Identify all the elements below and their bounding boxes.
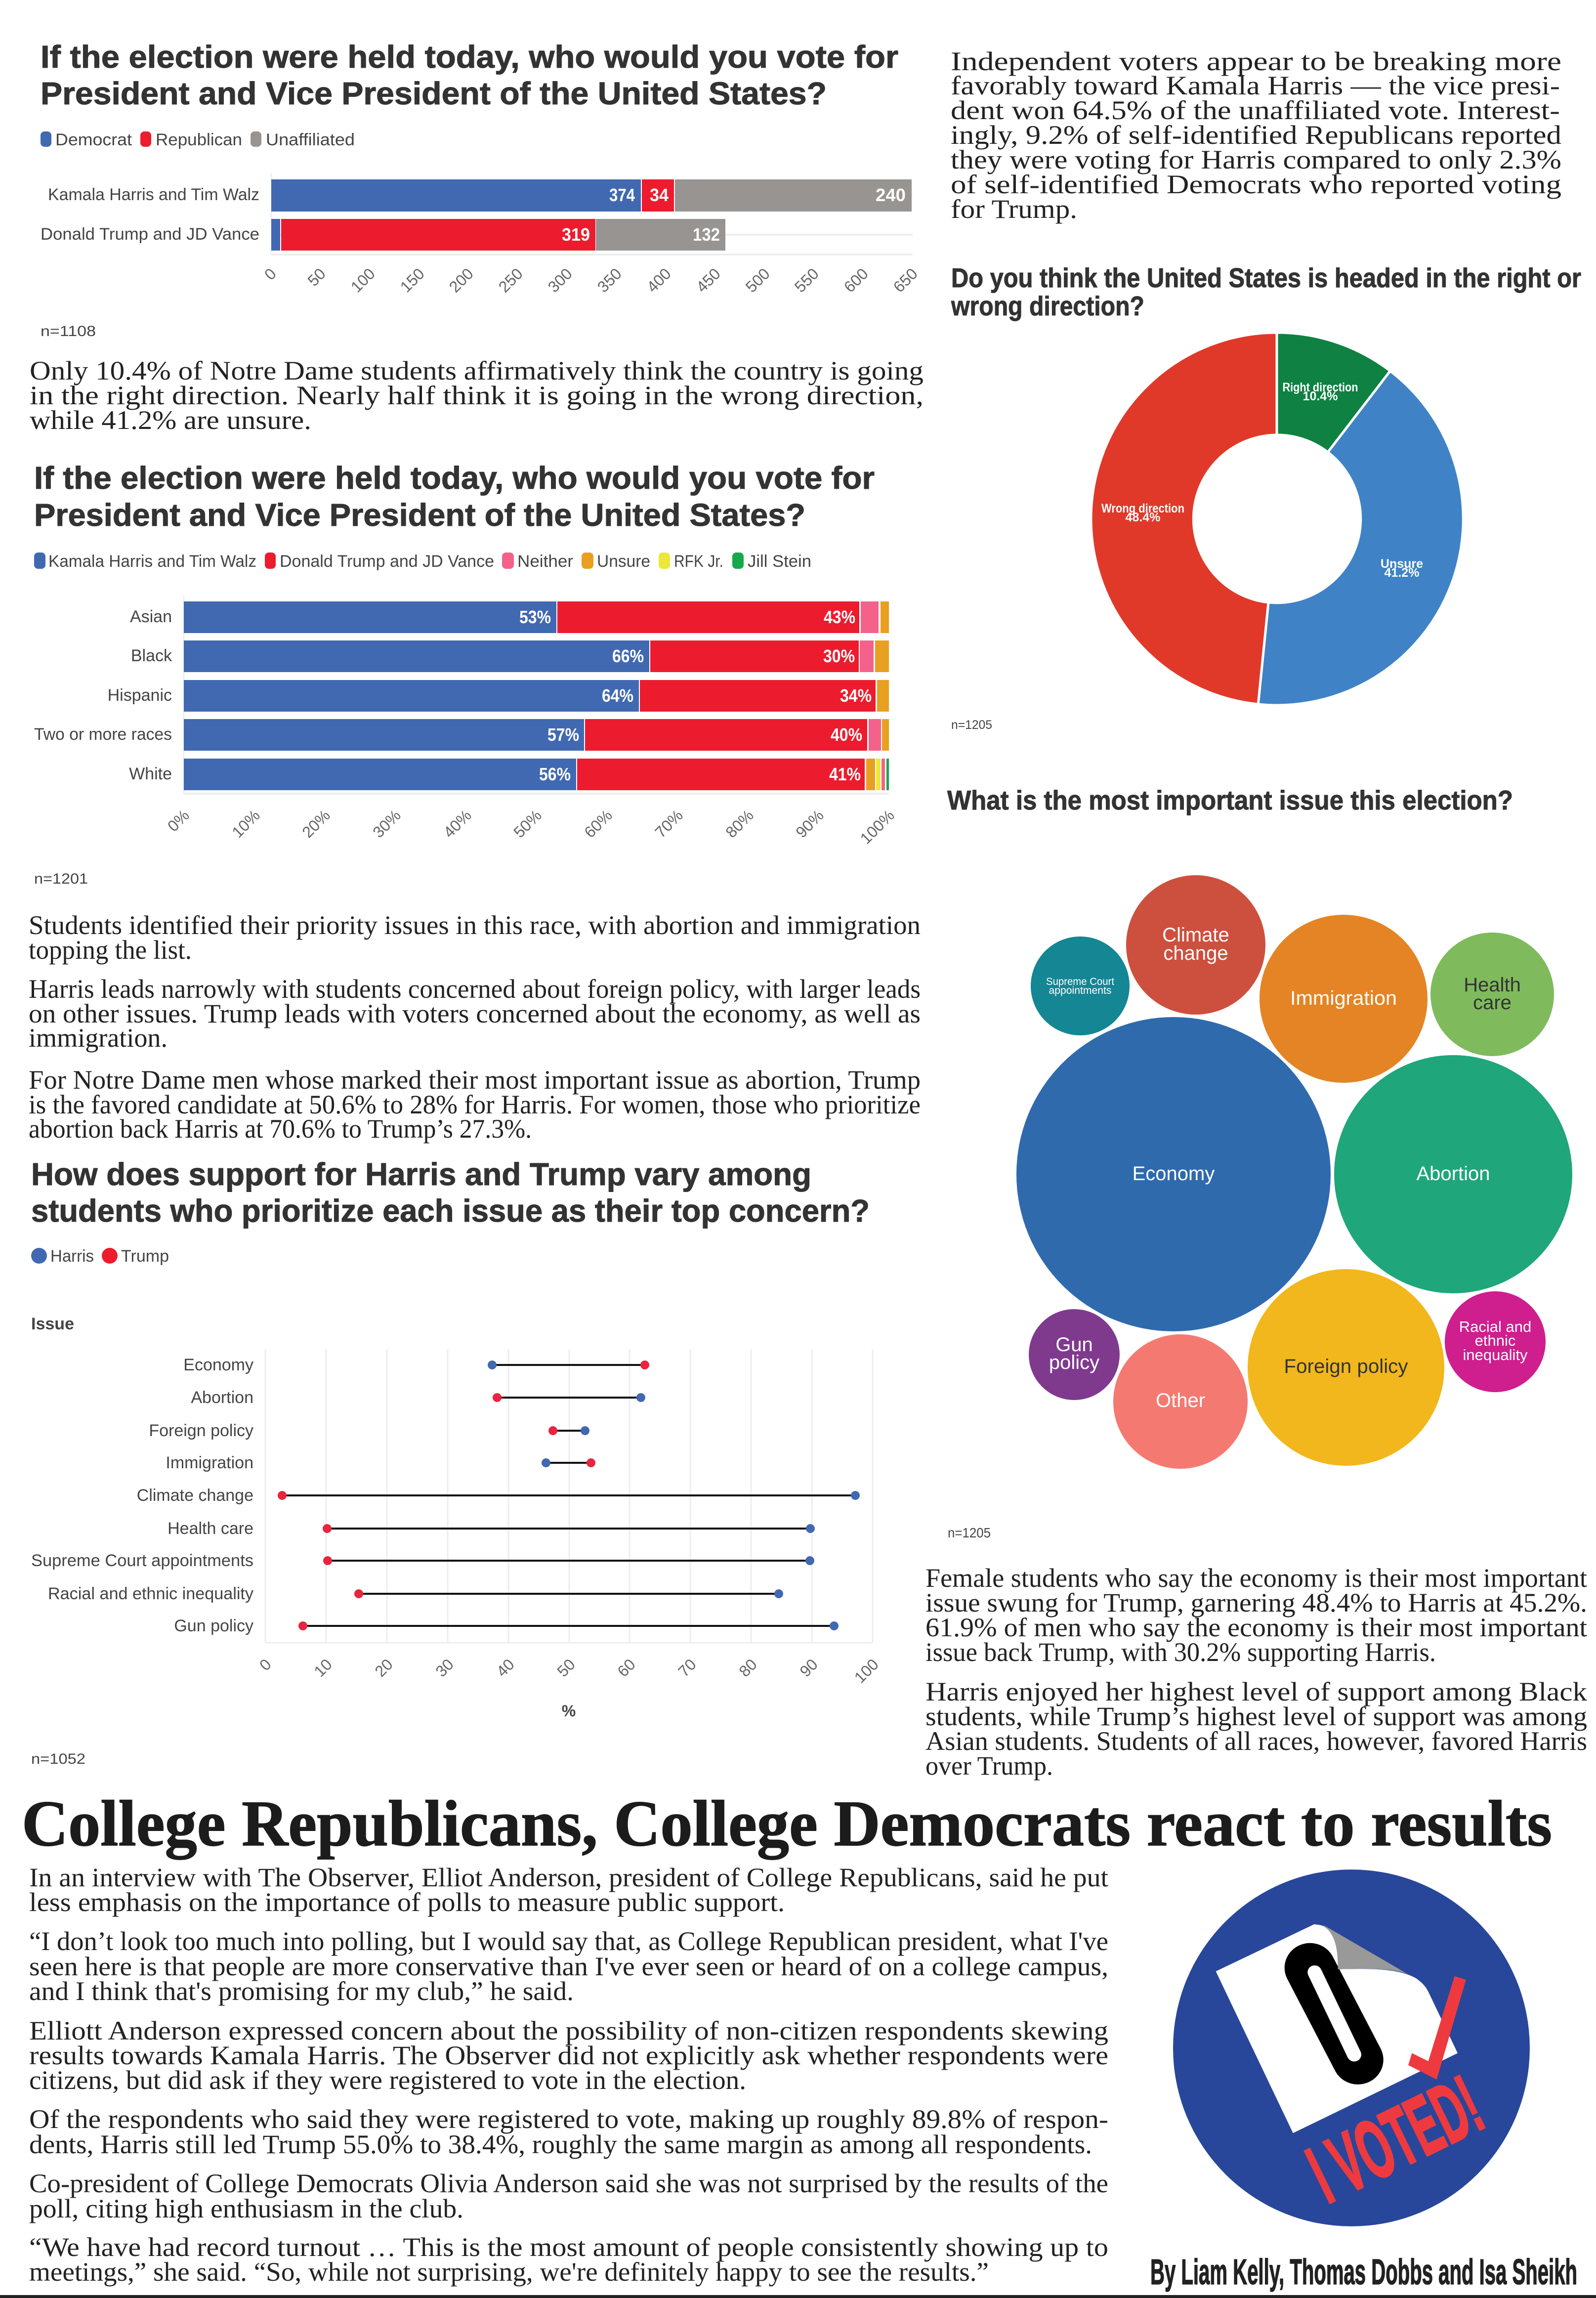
legend: candidates — [34, 552, 811, 571]
text block: reactions article: In an interview with The Observer, Elliot Anderson, president of College Republicans, said he put — [29, 1863, 1108, 1892]
bubble: gun policy — [1029, 1309, 1120, 1400]
chart: Harris vs Trump support by issue: 100 — [851, 1655, 882, 1687]
chart: stacked bars by party: 240 — [876, 185, 906, 205]
bubble: supreme court appointments: Supreme Court — [1046, 976, 1114, 987]
chart: stacked bars by race: 56% — [539, 764, 571, 784]
chart: stacked bars by race: 0% — [164, 806, 193, 835]
legend: Harris and Trump: Harris — [50, 1247, 94, 1266]
text block: gender and race: issue back Trump, with 30.2% supporting Harris. — [925, 1637, 1436, 1667]
donut label: right direction: Right direction — [1283, 381, 1358, 394]
title: vote by party: If the election were held today, who would you vote for — [41, 39, 898, 75]
chart: stacked bars by race: Hispanic — [108, 686, 172, 705]
text block: reactions article: Of the respondents who said they were registered to vote, making up roughly 89.8% of respon- — [29, 2104, 1108, 2134]
bubble: abortion — [1334, 1055, 1572, 1293]
chart: stacked bars by party: 250 — [495, 264, 526, 296]
bubble: foreign policy — [1248, 1269, 1444, 1466]
donut label: unsure: 41.2% — [1385, 566, 1419, 580]
chart: stacked bars by race: Asian — [130, 607, 172, 626]
title: support by issue — [31, 1156, 870, 1229]
chart: stacked bars by race: 40% — [831, 724, 862, 745]
text block: priority issues: For Notre Dame men whose marked their most important issue as abortion, Trump — [29, 1065, 921, 1095]
donut label: right direction: 10.4% — [1303, 389, 1338, 403]
chart: stacked bars by race: 100% — [857, 806, 898, 848]
bubble: racial and ethnic inequality: inequality — [1463, 1346, 1528, 1363]
chart: stacked bars by party: 132 — [693, 224, 720, 245]
text block: gender and race: 61.9% of men who say the economy is their most important — [925, 1613, 1587, 1642]
chart: stacked bars by party: 374 — [609, 185, 635, 205]
text block: reactions article: Co-president of College Democrats Olivia Anderson said she was not surprised by the results of the — [29, 2169, 1108, 2198]
chart: Harris vs Trump support by issue: Foreign policy — [149, 1421, 253, 1440]
chart: Harris vs Trump support by issue: % — [562, 1702, 576, 1720]
text block: independent voters: of self-identified Democrats who reported voting — [951, 170, 1561, 199]
chart: stacked bars by party: 0 — [261, 264, 280, 284]
chart: Harris vs Trump support by issue: Immigration — [166, 1453, 253, 1472]
chart: stacked bars by party: 650 — [890, 264, 921, 296]
chart: stacked bars by party: 400 — [643, 264, 674, 296]
axis title: issue: Issue — [31, 1315, 74, 1333]
bubble: climate change: Climate — [1162, 924, 1229, 946]
chart: Harris vs Trump support by issue: Economy — [183, 1356, 253, 1374]
text block: reactions article: less emphasis on the importance of polls to measure public support. — [29, 1887, 785, 1917]
chart: stacked bars by race: White — [129, 765, 172, 783]
text block: reactions article: poll, citing high enthusiasm in the club. — [29, 2194, 463, 2223]
title: vote by race — [34, 460, 875, 533]
chart: Harris vs Trump support by issue: Abortion — [191, 1388, 253, 1407]
chart: Harris vs Trump support by issue: Climate change — [137, 1486, 253, 1505]
text block: reactions article: dents, Harris still led Trump 55.0% to 38.4%, roughly the same margin as among all respondents. — [29, 2129, 1092, 2159]
chart: stacked bars by race: 70% — [651, 806, 686, 841]
text block: gender and race: over Trump. — [925, 1751, 1053, 1781]
bubble: immigration: Immigration — [1290, 987, 1397, 1009]
text block: gender and race: Female students who say the economy is their most important — [925, 1563, 1587, 1593]
chart: stacked bars by party: Kamala Harris and Tim Walz — [48, 185, 259, 204]
chart: Harris vs Trump support by issue: 80 — [735, 1655, 760, 1680]
legend: party: Republican — [156, 130, 242, 149]
legend: party: Unaffiliated — [266, 130, 355, 149]
text block: reactions article: and I think that's promising for my club,” he said. — [29, 1976, 574, 2006]
title: support by issue: students who prioritize each issue as their top concern? — [31, 1193, 870, 1229]
donut label: unsure: Unsure — [1381, 557, 1423, 571]
headline: College Republicans, College Democrats react to results — [22, 1787, 1552, 1860]
donut label: wrong direction — [1101, 502, 1184, 524]
chart: Harris vs Trump support by issue: Supreme Court appointments — [31, 1551, 253, 1570]
donut label: unsure — [1381, 557, 1423, 580]
chart: Harris vs Trump support by issue: 70 — [674, 1655, 700, 1680]
chart: stacked bars by party: 100 — [347, 264, 378, 296]
text block: priority issues: immigration. — [29, 1023, 168, 1053]
panel: bubble chart — [947, 785, 1572, 1540]
chart: stacked bars by race: Two or more races — [34, 725, 172, 744]
text block: priority issues: abortion back Harris at 70.6% to Trump’s 27.3%. — [29, 1114, 532, 1144]
bubble: gun policy: Gun — [1055, 1334, 1093, 1356]
legend: Harris and Trump — [31, 1247, 169, 1266]
bubble: supreme court appointments — [1031, 936, 1130, 1035]
legend: candidates: Kamala Harris and Tim Walz — [48, 552, 256, 571]
chart: stacked bars by race: 53% — [519, 607, 551, 627]
bubble: health care: care — [1473, 992, 1512, 1014]
chart: stacked bars by race: 30% — [369, 806, 404, 841]
text block: independent voters: favorably toward Kamala Harris — the vice presi- — [951, 71, 1560, 100]
chart: stacked bars by party: 350 — [594, 264, 625, 296]
bubble: health care — [1430, 933, 1554, 1056]
chart: Harris vs Trump support by issue: 30 — [432, 1655, 457, 1680]
chart: Harris vs Trump support by issue: Racial and ethnic inequality — [48, 1584, 253, 1603]
donut label: right direction — [1283, 381, 1358, 403]
text block: priority issues: on other issues. Trump leads with voters concerned about the economy, as well as — [29, 999, 921, 1028]
sample size: n=1108 — [41, 323, 96, 340]
chart: stacked bars by race — [34, 596, 898, 848]
legend: candidates: Donald Trump and JD Vance — [280, 552, 494, 571]
text block: reactions article: “We have had record turnout … This is the most amount of people consistently showing up to — [29, 2232, 1108, 2262]
bubble: immigration — [1260, 915, 1428, 1083]
chart: stacked bars by party: 450 — [693, 264, 724, 296]
chart: Harris vs Trump support by issue: 40 — [493, 1655, 518, 1680]
text block: reactions article: results towards Kamala Harris. The Observer did not explicitly ask whether respondents were — [29, 2041, 1108, 2070]
chart: stacked bars by race: 20% — [298, 806, 334, 841]
legend: candidates: Neither — [517, 552, 573, 571]
chart: stacked bars by race: 80% — [722, 806, 757, 841]
bubble: economy: Economy — [1133, 1163, 1215, 1185]
panel: race bar chart — [34, 460, 898, 887]
chart: Harris vs Trump support by issue: Health care — [168, 1519, 253, 1538]
legend: candidates: RFK Jr. — [674, 552, 723, 571]
chart: stacked bars by party: 200 — [446, 264, 477, 296]
chart: stacked bars by race: 57% — [547, 724, 579, 745]
chart: Harris vs Trump support by issue: 60 — [614, 1655, 639, 1680]
text block: priority issues: Harris leads narrowly with students concerned about foreign policy, with larger leads — [29, 974, 921, 1004]
chart: stacked bars by race: 40% — [440, 806, 475, 841]
chart: stacked bars by race: 43% — [824, 607, 855, 627]
text block: country direction summary: in the right direction. Nearly half think it is going in the wrong direction, — [30, 381, 924, 410]
chart: stacked bars by party — [41, 173, 921, 296]
chart: stacked bars by party: 319 — [562, 224, 590, 245]
chart: Harris vs Trump support by issue: 10 — [310, 1655, 336, 1680]
chart: Harris vs Trump support by issue: 50 — [553, 1655, 579, 1680]
chart: stacked bars by party: 34 — [650, 185, 669, 205]
legend: Harris and Trump: Trump — [121, 1247, 169, 1266]
bubble: health care: Health — [1464, 974, 1521, 996]
chart: stacked bars by party: 300 — [545, 264, 576, 296]
title: country direction: wrong direction? — [951, 291, 1144, 321]
chart: stacked bars by party: 600 — [840, 264, 872, 296]
chart: stacked bars by party: 150 — [397, 264, 428, 296]
text block: reactions article: citizens, but did ask if they were registered to vote in the election. — [29, 2065, 746, 2095]
chart: Harris vs Trump support by issue — [31, 1349, 882, 1720]
sample size: n=1205 — [951, 718, 992, 732]
text block: independent voters: ingly, 9.2% of self-identified Republicans reported — [951, 120, 1561, 150]
text block: priority issues: Students identified their priority issues in this race, with abortion and immigration — [29, 910, 921, 940]
title: vote by race: President and Vice President of the United States? — [34, 497, 805, 533]
chart: stacked bars by race: Black — [131, 646, 172, 665]
text block: priority issues — [29, 910, 921, 1144]
text block: independent voters: for Trump. — [951, 194, 1077, 224]
chart: stacked bars by race: 50% — [510, 806, 545, 841]
text block: country direction summary: while 41.2% are unsure. — [30, 405, 311, 435]
bubble: climate change: change — [1163, 942, 1228, 964]
legend: candidates: Unsure — [597, 552, 650, 571]
title: vote by party: President and Vice President of the United States? — [41, 76, 827, 111]
title: vote by race: If the election were held today, who would you vote for — [34, 460, 875, 496]
text block: reactions article: seen here is that people are more conservative than I've ever seen or heard of on a college campus, — [29, 1952, 1108, 1981]
sample size: n=1052 — [31, 1751, 85, 1767]
text block: gender and race: Harris enjoyed her highest level of support among Black — [925, 1677, 1587, 1706]
bubble: economy — [1016, 1017, 1331, 1331]
text block: gender and race: Asian students. Students of all races, however, favored Harris — [925, 1726, 1587, 1756]
text block: independent voters: they were voting for Harris compared to only 2.3% — [951, 145, 1561, 174]
chart: stacked bars by race: 41% — [829, 764, 861, 784]
chart: stacked bars by race: 64% — [602, 685, 633, 706]
chart: Harris vs Trump support by issue: 20 — [371, 1655, 396, 1680]
bubble: racial and ethnic inequality: ethnic — [1475, 1332, 1515, 1349]
chart: direction donut — [1091, 333, 1463, 705]
bubble: other: Other — [1156, 1390, 1205, 1411]
bubble: other — [1113, 1334, 1248, 1469]
text block: independent voters: dent won 64.5% of the unaffiliated vote. Interest- — [951, 95, 1560, 125]
panel: donut chart — [951, 262, 1581, 732]
bubble: foreign policy: Foreign policy — [1284, 1356, 1408, 1377]
bubble: climate change — [1126, 875, 1265, 1015]
text block: gender and race: issue swung for Trump, garnering 48.4% to Harris at 45.2%. — [925, 1588, 1587, 1617]
chart: stacked bars by race: 66% — [612, 646, 644, 666]
text block: independent voters — [951, 46, 1561, 224]
legend: party — [41, 130, 355, 149]
panel: party bar chart — [41, 39, 921, 340]
title: support by issue: How does support for Harris and Trump vary among — [31, 1156, 811, 1192]
text block: reactions article: meetings,” she said. “So, while not surprising, we're definitely happy to see the results.” — [29, 2257, 989, 2287]
bubble: supreme court appointments: appointments — [1049, 985, 1112, 996]
text block: priority issues: topping the list. — [29, 935, 192, 965]
text block: gender and race — [925, 1563, 1587, 1781]
title: country direction — [951, 262, 1581, 321]
text block: country direction summary — [30, 356, 924, 435]
chart: stacked bars by party: 50 — [304, 264, 329, 290]
text block: priority issues: is the favored candidate at 50.6% to 28% for Harris. For women, those who prioritize — [29, 1090, 921, 1119]
chart: Harris vs Trump support by issue: 90 — [796, 1655, 821, 1680]
chart: stacked bars by race: 30% — [823, 646, 855, 666]
legend: party: Democrat — [55, 130, 132, 149]
text block: reactions article — [29, 1863, 1108, 2287]
sample size: n=1201 — [34, 871, 88, 887]
panel: dumbbell chart — [31, 1156, 882, 1767]
title: vote by party — [41, 39, 898, 111]
chart: Harris vs Trump support by issue: 0 — [256, 1655, 275, 1674]
chart: stacked bars by party: Donald Trump and JD Vance — [41, 225, 259, 244]
sample size: n=1205 — [948, 1525, 991, 1540]
text block: gender and race: students, while Trump’s highest level of support was among — [925, 1702, 1587, 1731]
chart: stacked bars by race: 90% — [792, 806, 827, 841]
bubble: gun policy: policy — [1049, 1352, 1099, 1373]
chart: Harris vs Trump support by issue: Gun policy — [174, 1617, 253, 1635]
chart: stacked bars by party: 500 — [742, 264, 773, 296]
donut label: wrong direction: 48.4% — [1126, 511, 1160, 524]
bubble: abortion: Abortion — [1417, 1163, 1490, 1185]
text block: independent voters: Independent voters appear to be breaking more — [951, 46, 1561, 76]
chart: stacked bars by race: 34% — [840, 685, 872, 706]
chart: stacked bars by party: 550 — [791, 264, 822, 296]
text block: reactions article: Elliott Anderson expressed concern about the possibility of non-citizen respondents skewing — [29, 2016, 1108, 2045]
chart: stacked bars by race: 60% — [581, 806, 616, 841]
title: most important issue: What is the most important issue this election? — [947, 785, 1513, 815]
legend: candidates: Jill Stein — [748, 552, 811, 571]
bubble: racial and ethnic inequality: Racial and — [1459, 1318, 1531, 1335]
chart: stacked bars by race: 10% — [228, 806, 263, 841]
text block: country direction summary: Only 10.4% of Notre Dame students affirmatively think the country is going — [30, 356, 924, 385]
icon: I voted sticker — [1173, 1870, 1530, 2226]
bubble: racial and ethnic inequality — [1445, 1291, 1546, 1392]
text block: reactions article: “I don’t look too much into polling, but I would say that, as College Republican president, what I've — [29, 1926, 1108, 1956]
donut label: wrong direction: Wrong direction — [1101, 502, 1184, 515]
